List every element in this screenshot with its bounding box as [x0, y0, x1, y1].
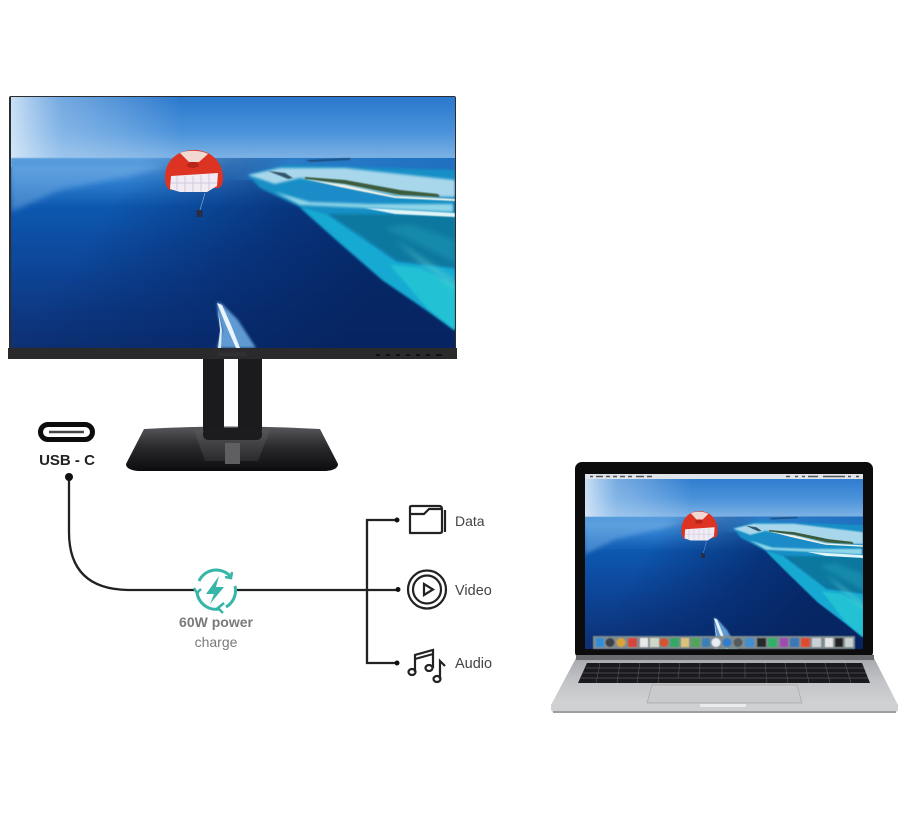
monitor stand neck — [203, 359, 262, 440]
laptop — [551, 462, 898, 713]
data label: Data — [455, 513, 485, 529]
laptop screen — [585, 474, 863, 650]
video label: Video — [455, 583, 492, 599]
icon: 60W power charge — [194, 570, 236, 613]
monitor bottom bezel: ViewSonic — [218, 352, 246, 358]
laptop trackpad — [647, 685, 802, 703]
audio label: Audio — [455, 656, 492, 672]
monitor bottom bezel — [8, 348, 457, 359]
laptop hinge — [576, 655, 874, 660]
USB-C label: USB - C — [39, 452, 95, 469]
laptop lid — [575, 462, 873, 659]
power label: charge — [195, 634, 238, 650]
menu bar — [585, 474, 863, 479]
power label — [179, 614, 254, 650]
infographic: USB-C connection — [8, 96, 898, 713]
power label: 60W power — [179, 614, 254, 630]
dock — [593, 636, 855, 649]
monitor screen — [11, 97, 455, 348]
monitor stand base — [126, 426, 338, 471]
laptop base — [551, 658, 898, 713]
icon: data folder — [410, 506, 445, 533]
laptop keyboard — [578, 663, 870, 683]
monitor — [8, 96, 457, 471]
connector cable — [65, 473, 400, 666]
icon: video play — [408, 570, 446, 608]
USB-C port icon — [40, 424, 92, 440]
monitor frame — [9, 96, 456, 358]
icon: audio notes — [408, 650, 445, 682]
